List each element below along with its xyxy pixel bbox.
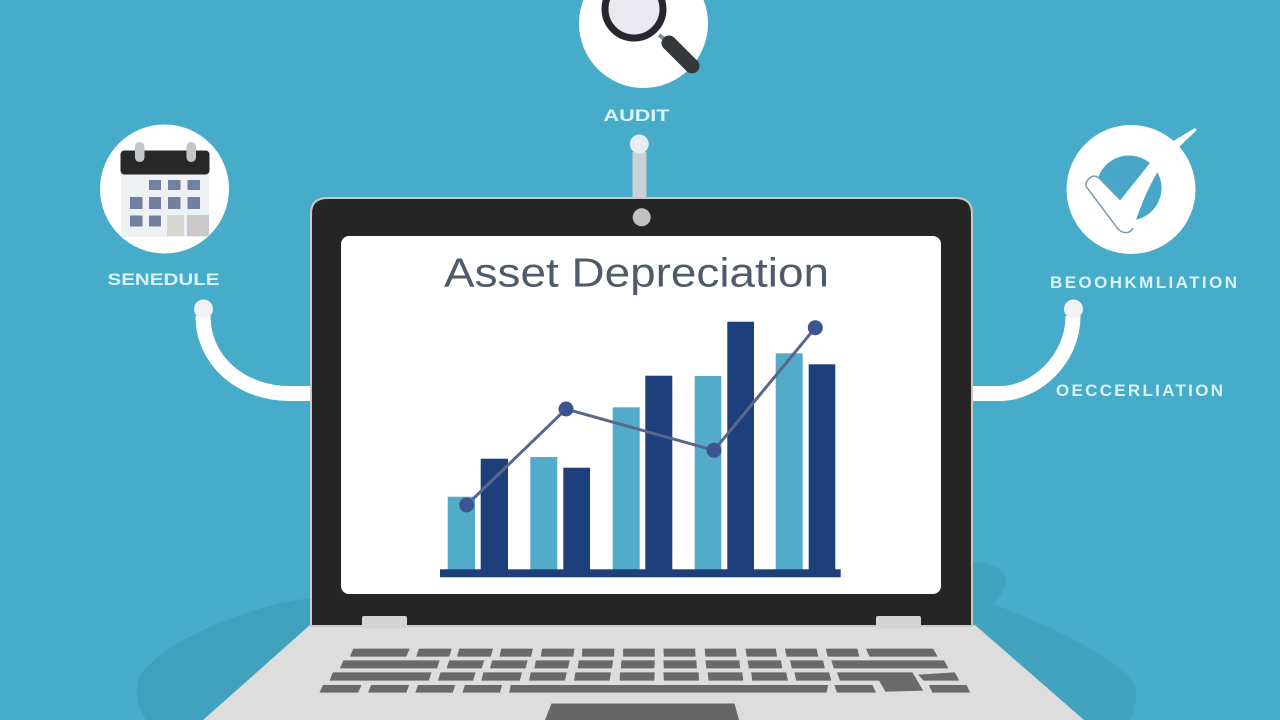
label: audit: AUDIT bbox=[604, 106, 670, 125]
screen panel bbox=[341, 236, 941, 594]
trend line bbox=[459, 320, 823, 512]
heading: Asset Depreciation bbox=[444, 250, 829, 296]
keyboard bbox=[320, 649, 970, 693]
webcam bbox=[633, 208, 651, 226]
icon: calendar badge bbox=[100, 124, 229, 254]
icon: magnifier badge bbox=[579, 0, 708, 88]
laptop bbox=[203, 198, 1084, 720]
bar chart bbox=[440, 322, 841, 577]
laptop lid bbox=[311, 198, 972, 626]
hinge right bbox=[876, 616, 921, 628]
connector: reconciliation bbox=[972, 300, 1083, 394]
laptop base bbox=[203, 625, 1084, 720]
hinge left bbox=[362, 616, 407, 628]
label: deceleration: OECCERLIATION bbox=[1056, 381, 1223, 400]
label: reconciliation: BEOOHKMLIATION bbox=[1050, 273, 1237, 292]
connector: audit bbox=[630, 134, 649, 200]
icon: check badge bbox=[1066, 125, 1197, 254]
label: schedule: SENEDULE bbox=[108, 270, 220, 289]
trackpad bbox=[545, 704, 739, 720]
shadow: right of laptop bbox=[972, 562, 1136, 720]
connector: schedule bbox=[194, 300, 312, 394]
shadow: left of laptop bbox=[137, 598, 311, 720]
